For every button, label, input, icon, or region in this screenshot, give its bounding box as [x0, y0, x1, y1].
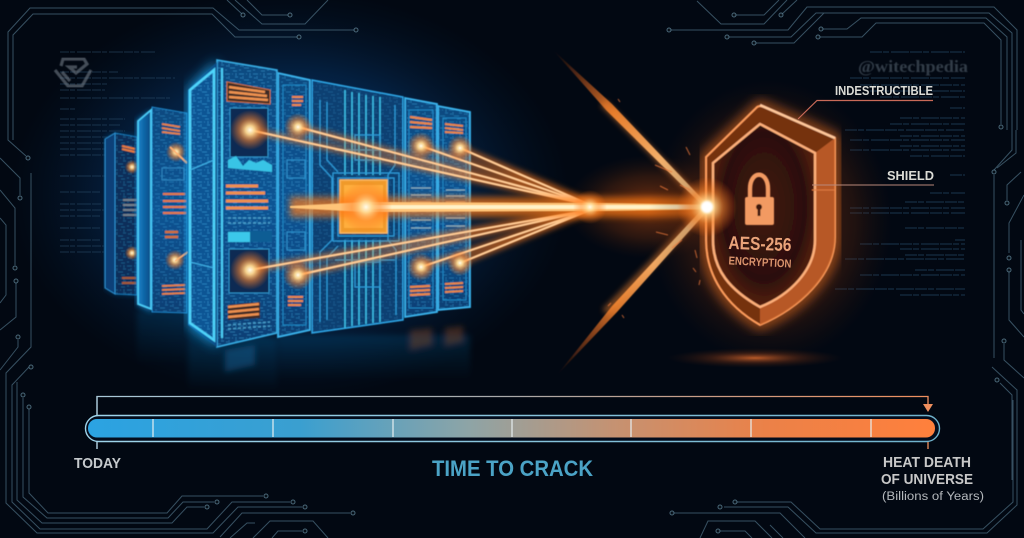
shield halo: [648, 80, 892, 364]
shield text: Encryption: ENCRYPTION: [728, 255, 792, 271]
shield text: AES-256: AES-256: [728, 232, 792, 255]
server rack 1: [105, 133, 139, 295]
callout: shield: [812, 168, 934, 185]
label: today: TODAY: [74, 456, 121, 472]
server rack 5: central processor: [312, 80, 403, 333]
background code text, left: [60, 52, 175, 252]
laser beams from servers: [250, 127, 600, 275]
server rack 3: front tower: [188, 60, 277, 347]
impact flare: [573, 177, 737, 237]
logo watermark: [55, 59, 91, 86]
server rack 6: [405, 98, 437, 317]
label: heat death of universe: OF UNIVERSE: [881, 472, 973, 488]
server rack 2: [137, 107, 188, 313]
timeline bracket and arrow: [97, 396, 933, 449]
label: heat death of universe: HEAT DEATH: [883, 455, 971, 471]
shield: [706, 105, 835, 325]
shield ground glow: [667, 348, 843, 368]
sparks: [608, 99, 700, 318]
impact haze along beam: [565, 155, 735, 259]
server reflections: [137, 310, 470, 392]
burst rays at impact point: [553, 50, 709, 375]
callout: indestructible: INDESTRUCTIBLE: [835, 84, 933, 98]
timeline progress bar: [86, 416, 940, 442]
server glow nodes: [230, 110, 473, 290]
background code text, right: [835, 52, 965, 295]
server rack 4: [278, 73, 310, 337]
label: heat death of universe: (Billions of Years): [882, 491, 984, 503]
callout: indestructible: [798, 84, 933, 119]
blue glow behind servers: [10, 0, 570, 400]
watermark handle: @witechpedia: [858, 57, 968, 76]
server rack 7: [438, 106, 470, 310]
padlock icon: [745, 175, 774, 225]
main beam: [290, 197, 710, 217]
label: heat death of universe: [881, 455, 984, 503]
callout: shield: SHIELD: [887, 168, 934, 183]
heading: time to crack: TIME TO CRACK: [432, 456, 593, 481]
